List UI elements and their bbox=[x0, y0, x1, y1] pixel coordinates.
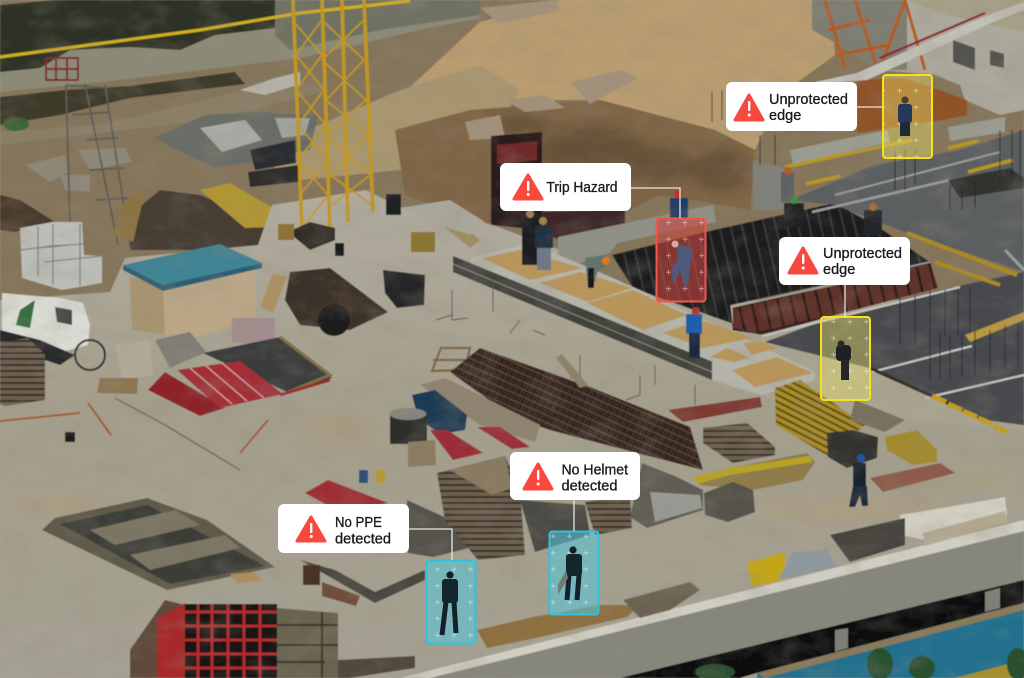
shed bbox=[123, 244, 262, 337]
grey pile bbox=[630, 463, 703, 528]
dirt field base bbox=[0, 0, 1024, 300]
red edge form bbox=[668, 397, 762, 422]
form light edge bbox=[733, 262, 930, 307]
scrap white pile at wall bbox=[240, 72, 300, 95]
planks bottom bbox=[338, 656, 415, 678]
warning icon bbox=[524, 464, 552, 489]
black crate bbox=[383, 270, 425, 308]
white rolls bbox=[900, 497, 1008, 546]
label text: Trip Hazard bbox=[546, 180, 618, 196]
red pallet behind callout bbox=[305, 480, 388, 512]
wall corner bbox=[753, 160, 787, 210]
worker: green helmet bbox=[784, 196, 804, 227]
callout: no helmet detected bbox=[510, 452, 640, 500]
crane base bbox=[288, 222, 344, 256]
concrete cylinder bbox=[390, 408, 427, 444]
lumber yellow bbox=[200, 183, 273, 228]
scaffolding bbox=[66, 84, 130, 245]
rebar mesh central bbox=[450, 348, 703, 470]
workers: pair on bed bbox=[522, 210, 553, 270]
bed end wall lower bbox=[712, 362, 815, 395]
wood board bbox=[260, 273, 287, 313]
rebar on slab bbox=[900, 288, 1018, 380]
yellow tarp bbox=[747, 552, 785, 587]
warning icon bbox=[735, 95, 763, 120]
debris by beam bbox=[623, 582, 700, 618]
paint cans bbox=[359, 470, 385, 483]
dark sheets middle bbox=[520, 500, 590, 552]
person silhouette top bbox=[898, 96, 912, 136]
orange cabin bbox=[857, 78, 967, 133]
concrete beam face bbox=[420, 531, 1024, 678]
label text: detected bbox=[335, 532, 391, 548]
concrete beam top bbox=[400, 520, 1024, 678]
slab lower edge bbox=[870, 368, 985, 420]
label text: No PPE bbox=[335, 515, 382, 531]
detection box: red trip hazard bbox=[656, 218, 706, 302]
road bbox=[0, 82, 330, 145]
concrete wall behind workers bbox=[558, 205, 716, 265]
label text: edge bbox=[823, 262, 855, 278]
warning icon bbox=[514, 175, 542, 199]
excavated dirt bbox=[395, 100, 755, 225]
IBC tank and cables bbox=[75, 340, 153, 380]
worker: right bbox=[864, 203, 882, 235]
slab highlights bbox=[762, 287, 1024, 398]
worker: orange helmet on wall bbox=[781, 167, 794, 202]
pipe and stool bbox=[303, 565, 360, 606]
wall right of crane bbox=[275, 0, 480, 50]
person silhouette helmet bbox=[558, 546, 582, 600]
rear concrete wall top right bbox=[812, 0, 1024, 115]
leader line: lower unprotected edge bbox=[844, 285, 846, 317]
person silhouette lower bbox=[836, 340, 851, 380]
pale slab back bbox=[400, 200, 485, 235]
crate mid bbox=[704, 482, 755, 522]
stack right bbox=[585, 495, 632, 535]
wood stack centre back bbox=[430, 210, 480, 248]
fence lights bbox=[453, 264, 712, 372]
spool and small machinery bbox=[278, 194, 435, 252]
van bbox=[0, 293, 90, 365]
yellow planks bbox=[693, 453, 815, 490]
green shrub bbox=[3, 117, 29, 131]
dark lumber pile bbox=[130, 190, 270, 250]
callout: unprotected edge lower bbox=[779, 237, 910, 285]
warning icon bbox=[789, 248, 817, 273]
leader line: trip hazard bbox=[631, 188, 680, 218]
crack in concrete bbox=[115, 398, 240, 470]
worker: blue centre bbox=[686, 307, 702, 358]
red formwork bottom bbox=[130, 600, 338, 678]
foliage over wall bbox=[0, 0, 275, 72]
rebar bundle bbox=[285, 268, 388, 330]
grey trough bbox=[155, 332, 206, 368]
bricks pallet bbox=[232, 318, 275, 343]
warning icon bbox=[297, 517, 325, 541]
tower wall in shadow bbox=[812, 0, 907, 70]
label text: No Helmet bbox=[562, 462, 628, 478]
lower slab bbox=[765, 272, 1024, 425]
pallet bbox=[97, 378, 138, 394]
dark sheet left bbox=[42, 498, 275, 590]
worker: blue walking bbox=[849, 454, 868, 507]
red pallets bbox=[148, 361, 330, 416]
detection box: cyan no helmet bbox=[550, 532, 598, 614]
dark underside bbox=[620, 580, 1024, 678]
blue wall cap bbox=[757, 603, 1024, 678]
rubble pile bbox=[153, 112, 318, 170]
yellow stack right bbox=[885, 430, 937, 465]
label text: detected bbox=[562, 478, 618, 494]
wood on mesh bbox=[556, 354, 588, 388]
concrete slabs on sand bbox=[465, 0, 638, 140]
worker: blue by wall bbox=[670, 190, 688, 218]
callout: unprotected edge top bbox=[726, 82, 857, 131]
detection box: yellow lower right bbox=[821, 317, 870, 400]
detection box: yellow top right bbox=[883, 75, 932, 158]
wall windows bbox=[953, 40, 1004, 70]
plants bbox=[695, 648, 1024, 678]
raised bed frame bbox=[470, 243, 815, 395]
bushes along wall bbox=[0, 72, 245, 125]
sand bed tiles bbox=[482, 250, 813, 387]
lumber yellow stack bbox=[775, 380, 865, 456]
dark stack bbox=[407, 500, 473, 557]
rear wall bbox=[0, 0, 480, 92]
plank stack mid bbox=[703, 423, 775, 463]
person silhouette red bbox=[672, 240, 692, 286]
brown stack main bbox=[437, 456, 525, 560]
dark timber left bbox=[0, 195, 55, 232]
stack top sheet bbox=[450, 456, 512, 495]
red formwork back bbox=[491, 132, 542, 230]
callout: no PPE detected bbox=[278, 504, 409, 553]
box on ground bbox=[408, 440, 436, 467]
wooden frame bbox=[432, 348, 470, 371]
tower crane bbox=[293, 0, 373, 232]
upper slab bbox=[790, 130, 1024, 272]
label text: Unprotected bbox=[769, 92, 848, 108]
leader line: top unprotected edge bbox=[857, 106, 883, 108]
yellow patch bbox=[955, 660, 1024, 678]
rebar around walls bbox=[712, 90, 1020, 210]
person silhouette PPE bbox=[442, 571, 458, 635]
stack left bbox=[0, 338, 45, 406]
blue hose bbox=[412, 390, 467, 434]
concrete ground bbox=[0, 190, 1024, 678]
sandy track left bbox=[250, 65, 520, 180]
orange lattice crane bbox=[825, 0, 925, 70]
detection box: cyan no PPE bbox=[426, 560, 476, 644]
rods on ground bbox=[0, 403, 268, 453]
sandy stain on ground bbox=[15, 416, 1020, 522]
red gate on wall bbox=[46, 58, 78, 80]
grey tarp bbox=[778, 550, 837, 580]
yellow edge beam bbox=[785, 140, 1013, 184]
top strip bbox=[907, 0, 1024, 32]
upper walls bbox=[790, 117, 1005, 165]
tripod stands bbox=[436, 280, 695, 405]
label text: Unprotected bbox=[823, 246, 902, 262]
timber on slab bbox=[965, 312, 1024, 342]
dark crate bbox=[827, 430, 878, 468]
planks by mesh bbox=[420, 378, 540, 442]
leader line: no PPE bbox=[409, 529, 452, 560]
yellow pipe bbox=[0, 1, 410, 57]
red pallets centre bbox=[430, 427, 530, 460]
dark frames on beam bbox=[830, 518, 905, 562]
concrete pump boom bbox=[815, 2, 1024, 84]
callout: trip hazard bbox=[500, 163, 631, 211]
white blocks bbox=[20, 222, 102, 290]
yellow steps lower edge bbox=[932, 396, 1007, 432]
tire bbox=[318, 304, 350, 336]
timber pile right bbox=[850, 400, 905, 432]
yellow beam along slab bbox=[907, 233, 1017, 285]
leaning board bbox=[112, 188, 146, 242]
sand hill bbox=[380, 0, 835, 150]
rear rebar red bbox=[540, 210, 625, 240]
concrete rubble slabs bbox=[25, 148, 132, 192]
black formwork bbox=[612, 203, 930, 335]
dirt clumps bbox=[490, 116, 750, 190]
red-brown formwork bbox=[733, 262, 938, 335]
dark tracked machine bbox=[248, 165, 298, 187]
red pallet right bbox=[870, 463, 955, 492]
pallet under sheet bbox=[230, 572, 261, 584]
fence along bed bbox=[453, 256, 713, 380]
leader line: no helmet bbox=[573, 500, 575, 531]
slab markings bbox=[812, 152, 1024, 270]
dark concrete block bbox=[948, 168, 1024, 198]
lower sheet frame bbox=[300, 560, 425, 603]
beam pillars bbox=[835, 588, 1000, 652]
label text: edge bbox=[769, 108, 801, 124]
dark slab with red edge bbox=[203, 337, 332, 392]
worker: bending bbox=[585, 255, 610, 288]
wood pile bottom bbox=[477, 605, 640, 648]
blue wall bbox=[757, 603, 1024, 678]
